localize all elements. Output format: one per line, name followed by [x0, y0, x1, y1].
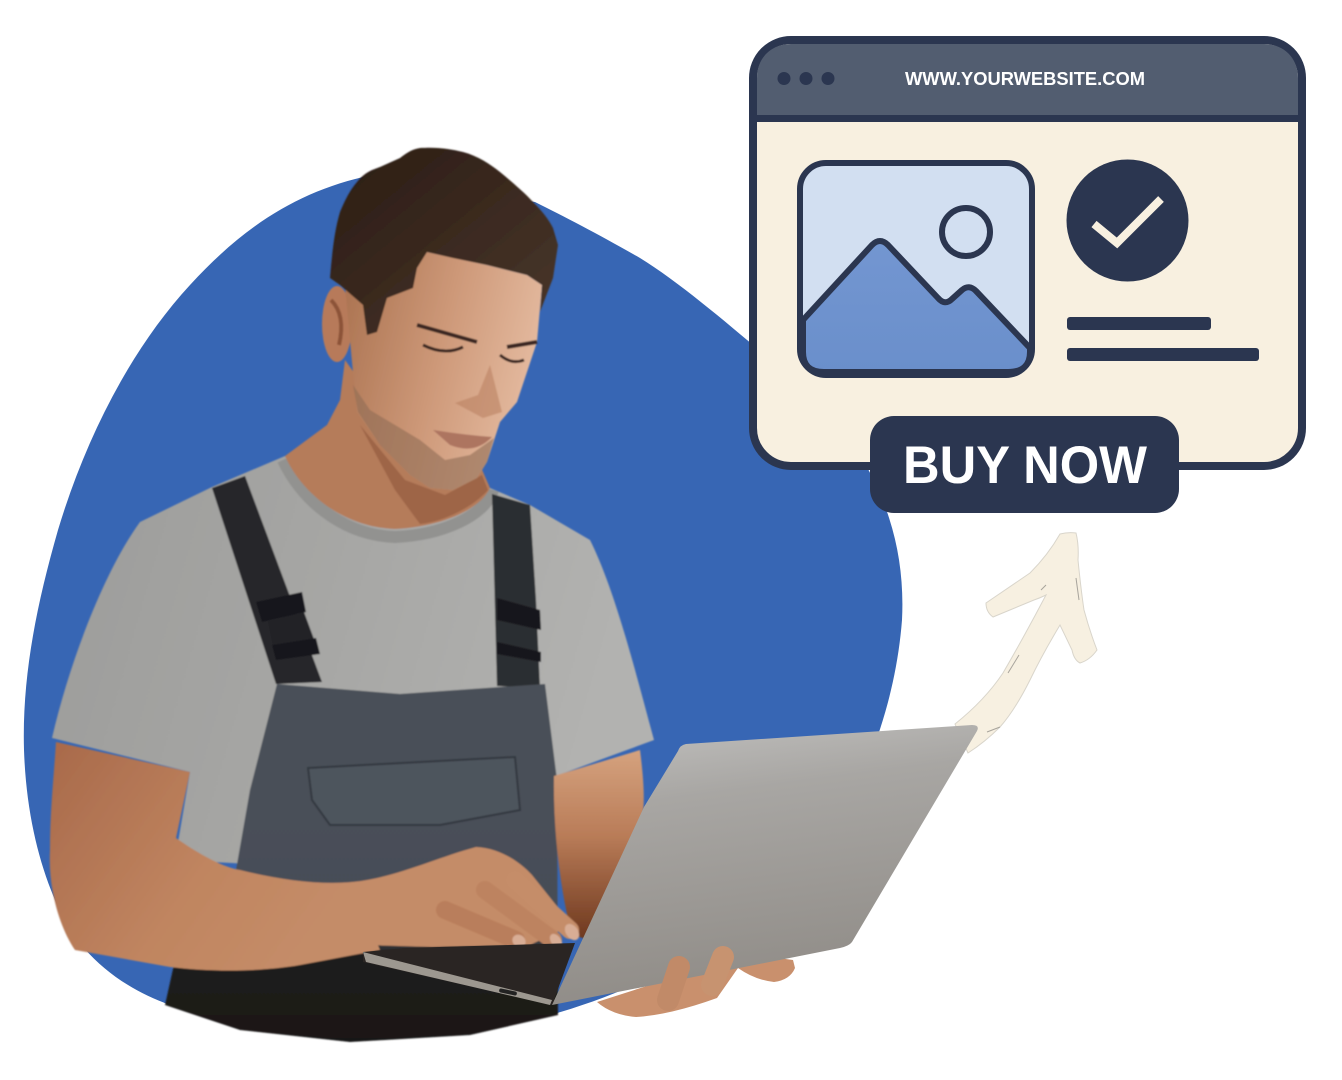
ear: [322, 286, 352, 362]
nose shadow: [455, 365, 502, 418]
man with overalls: [50, 148, 654, 1042]
browser body: [753, 40, 1302, 466]
right forearm: [554, 750, 644, 940]
hand under laptop: [597, 950, 795, 1017]
browser header bar: [757, 44, 1298, 116]
right strap: [492, 494, 541, 688]
face: [345, 252, 542, 490]
image placeholder icon: [800, 163, 1032, 375]
shirt collar: [283, 460, 493, 537]
window dots: [778, 72, 834, 85]
buy now button: BUY NOW: [903, 436, 1147, 495]
laptop lid: [552, 725, 978, 1005]
blue blob background: [24, 175, 902, 1015]
neck: [285, 360, 490, 529]
lips: [433, 430, 492, 449]
laptop: [363, 725, 978, 1017]
hand-drawn arrow: [955, 533, 1097, 753]
overalls bib and trousers: [165, 684, 558, 1042]
website url: WWW.YOURWEBSITE.COM: [905, 69, 1145, 89]
browser window: [753, 40, 1302, 513]
hair: [330, 148, 558, 335]
bib pocket: [308, 757, 520, 825]
typing hand: [352, 847, 582, 950]
check mark badge: [1066, 160, 1188, 282]
fingers over lid: [668, 957, 723, 1000]
buy now button: [870, 416, 1179, 513]
left strap: [212, 476, 322, 684]
text lines: [1067, 317, 1259, 361]
neck shadow: [360, 425, 488, 524]
t-shirt: [52, 456, 654, 880]
eyes and brows: [417, 325, 537, 362]
beard stubble: [353, 385, 494, 490]
left arm: [50, 742, 380, 971]
keyboard base: [363, 943, 575, 1005]
